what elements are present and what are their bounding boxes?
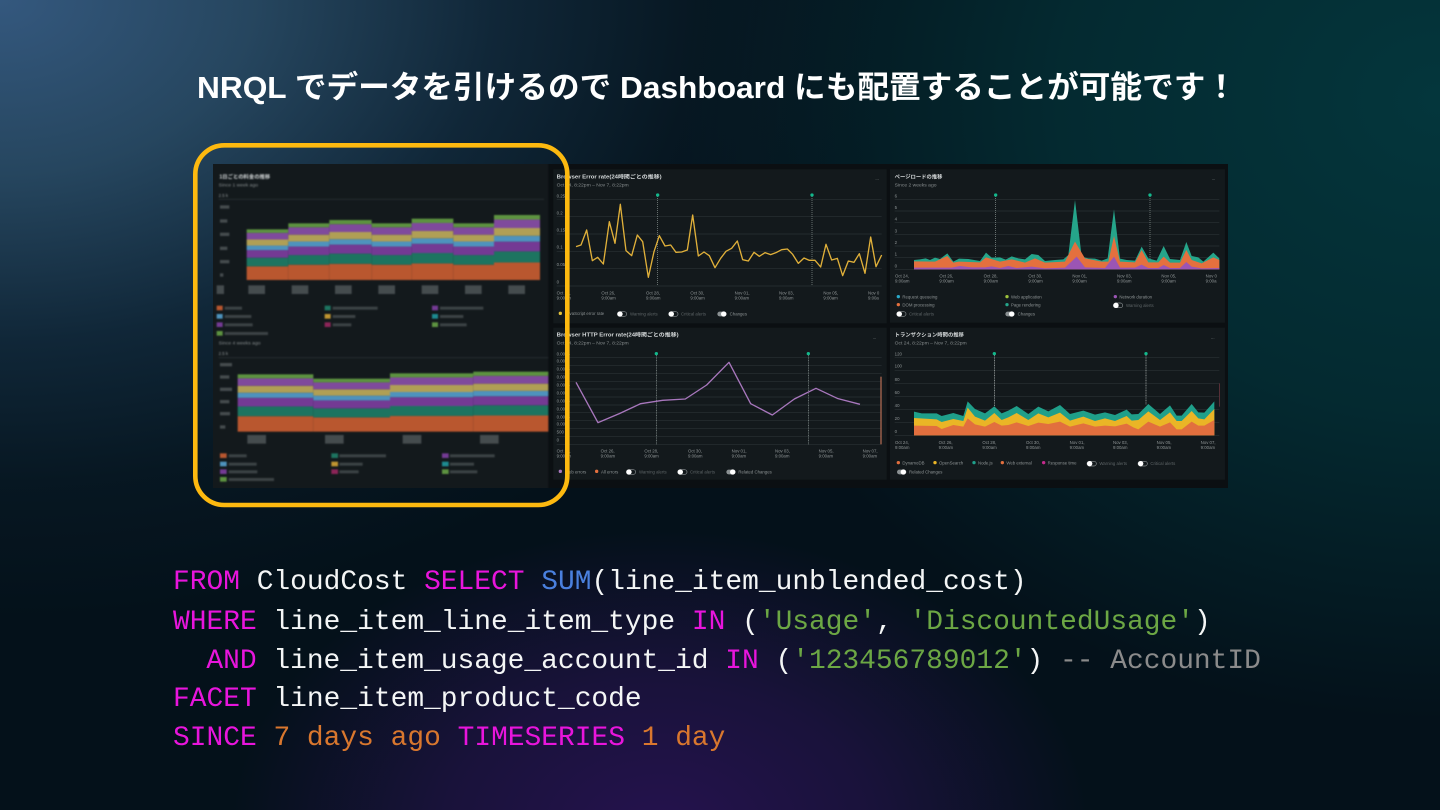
panel: blurred cost charts: 2.5 k [219,193,229,198]
panel: browser error rate: Oct 24, [557,290,571,295]
panel: browser error rate: Oct 26, [601,290,615,295]
panel: page load: 9:00am [1117,279,1132,284]
panel: browser error rate: Warning alerts [630,312,658,317]
panel: browser HTTP error rate: ... [873,334,876,339]
panel: browser error rate: 9:00am [557,295,571,300]
panel: browser HTTP error rate: 0.0035 [557,383,570,388]
panel: transaction time: 120 [895,351,902,356]
panel: browser HTTP error rate: 0.005 [557,359,568,364]
panel: page load: ... [1212,176,1215,181]
panel: browser error rate: ... [875,176,879,181]
panel: browser HTTP error rate: 0 [557,438,560,443]
panel: browser error rate: Changes [730,312,747,317]
panel: page load: 9:00a [1206,279,1217,284]
panel: transaction time: Related Changes [909,470,942,475]
panel: page load: Critical alerts [909,312,934,317]
panel: page load: Oct 28, [984,274,998,279]
code block: NRQL query: WHERE line_item_line_item_type IN ('Usage', 'DiscountedUsage') [173,607,1211,638]
panel: transaction time: 60 [895,390,900,395]
panel: browser HTTP error rate: Oct 30, [688,448,702,453]
panel: browser error rate: Nov 01, [735,290,750,295]
code block: NRQL query: AND line_item_usage_account_id IN ('123456789012') -- AccountID [206,646,1261,677]
panel: transaction time: 9:00am [1026,445,1041,450]
panel: transaction time [890,328,1225,480]
panel: transaction time: Oct 28, [982,440,996,445]
panel: browser error rate: 9:00am [690,295,705,300]
panel: blurred cost charts: 2.5 k [219,351,229,356]
panel: page load: Nov 03, [1117,274,1132,279]
panel: page load: 3 [895,228,898,233]
panel: page load: 5 [895,205,898,210]
panel: transaction time: Oct 30, [1026,440,1040,445]
panel: browser HTTP error rate: Related Changes [738,470,772,475]
panel: browser error rate: Browser Error rate(24時間ごとの推移) [557,173,662,181]
panel: browser error rate: Nov 0 [868,290,880,295]
panel: browser error rate [553,169,887,323]
panel: browser error rate: 9:00am [735,295,749,300]
panel: browser error rate: 9:00am [779,295,794,300]
panel: transaction time: Oct 24, [895,440,909,445]
panel: page load: Request queueing [902,294,938,299]
panel: blurred cost charts: 1日ごとの料金の推移 [219,172,271,180]
panel: page load: Changes [1018,312,1035,317]
panel: browser HTTP error rate: Nov 07, [863,448,878,453]
panel: browser HTTP error rate: 9:00am [819,453,833,458]
panel: page load: 6 [895,193,898,198]
panel: browser HTTP error rate: Oct 24, [557,448,571,453]
panel: browser HTTP error rate: Oct 24, 8:22pm – Nov 7, 8:22pm [557,340,629,346]
panel: browser error rate: Oct 28, [646,290,660,295]
panel: browser HTTP error rate: 0.0015 [557,414,570,419]
panel: transaction time: OpenSearch [939,460,964,465]
panel: browser HTTP error rate: 0.0055 [557,351,570,356]
panel: page load: 1 [895,252,898,257]
panel: browser HTTP error rate: Browser HTTP Error rate(24時間ごとの推移) [557,331,679,339]
panel: page load: 9:00am [1028,279,1043,284]
panel: page load: Web application [1011,294,1042,299]
panel: page load: Nov 05, [1161,274,1176,279]
panel: transaction time: Nov 03, [1113,440,1128,445]
panel: browser error rate: 0.2 [557,211,563,216]
panel: transaction time: 9:00am [1070,445,1084,450]
panel: browser error rate: 0 [557,280,560,285]
panel: page load: Warning alerts [1126,303,1154,308]
callout: yellow highlight frame [195,145,567,505]
panel: page load: 9:00am [1161,279,1176,284]
panel: transaction time: Web external [1006,460,1032,465]
panel: browser error rate: 9:00a [868,295,879,300]
panel: transaction time: 9:00am [939,445,953,450]
panel: transaction time: 9:00am [982,445,997,450]
panel: browser error rate: Oct 30, [690,290,704,295]
panel: browser HTTP error rate: 0.004 [557,375,568,380]
panel: page load: DOM processing [902,302,935,307]
panel: browser HTTP error rate: 0.001 [557,422,568,427]
panel: browser HTTP error rate: Critical alerts [690,470,715,475]
panel: browser error rate: 0.1 [557,245,563,250]
code block: NRQL query [173,567,1261,754]
panel: page load: 0 [895,263,898,268]
panel: browser HTTP error rate: Nov 03, [775,448,790,453]
panel: transaction time: Node.js [978,460,993,465]
panel: browser error rate: 0.25 [557,193,566,198]
panel: browser HTTP error rate: Warning alerts [639,470,667,475]
panel: blurred cost charts: Since 4 weeks ago [219,340,261,346]
panel: browser error rate: 0.05 [557,262,566,267]
panel: browser error rate: JavaScript error rate [565,311,605,316]
panel: transaction time: 9:00am [895,445,910,450]
panel: transaction time: 20 [895,416,900,421]
panel: browser error rate: Nov 03, [779,290,794,295]
panel: page load: 2 [895,240,898,245]
title: NRQL でデータを引けるので Dashboard にも配置することが可能です！ [197,70,1237,105]
panel: transaction time: ... [1211,334,1215,339]
panel: transaction time: 9:00am [1113,445,1128,450]
panel: browser HTTP error rate: 9:00am [775,453,790,458]
panel: transaction time: Critical alerts [1150,461,1175,466]
panel: transaction time: Oct 24, 8:22pm – Nov 7, 8:22pm [895,340,967,346]
panel: page load: 9:00am [1072,279,1087,284]
panel: blurred cost charts [210,160,548,490]
panel: transaction time: Nov 07, [1201,440,1216,445]
panel: transaction time: Response time [1048,460,1077,465]
panel: page load: 9:00am [984,279,998,284]
panel: transaction time: Nov 05, [1157,440,1172,445]
panel: browser error rate: 9:00am [601,295,616,300]
panel: transaction time: Warning alerts [1099,461,1127,466]
panel: page load: 4 [895,217,898,222]
panel: page load: Oct 30, [1028,274,1042,279]
panel: transaction time: 9:00am [1201,445,1215,450]
panel: browser error rate: Oct 24, 8:22pm – Nov 7, 8:22pm [557,182,629,188]
panel: browser error rate: 0.15 [557,228,566,233]
panel: browser error rate: Critical alerts [681,312,706,317]
panel: transaction time: 9:00am [1157,445,1171,450]
panel: page load: Oct 26, [939,274,953,279]
panel: browser HTTP error rate: 0.0025 [557,398,570,403]
panel: transaction time: 80 [895,377,900,382]
code block: NRQL query: FACET line_item_product_code [173,684,642,715]
panel: page load: ページロードの推移 [895,172,943,180]
panel: browser error rate: 9:00am [823,295,838,300]
panel: browser HTTP error rate: Oct 28, [644,448,658,453]
panel: transaction time: 0 [895,429,898,434]
panel: browser HTTP error rate: 9:00am [557,453,571,458]
panel: transaction time: トランザクション時間の推移 [895,331,965,339]
panel: page load: Nov 0 [1206,274,1218,279]
panel: browser HTTP error rate: 500 µ [557,430,568,435]
panel: browser HTTP error rate: 0.003 [557,390,568,395]
panel: transaction time: Oct 26, [939,440,953,445]
panel: transaction time: DynamoDB [902,460,925,465]
panel: browser HTTP error rate: Nov 05, [819,448,834,453]
panel: browser HTTP error rate: 9:00am [644,453,659,458]
panel: page load [890,169,1225,323]
panel: browser HTTP error rate: All errors [601,469,618,474]
panel: browser HTTP error rate: 9:00am [863,453,877,458]
panel: page load: Network duration [1119,294,1153,299]
panel: browser HTTP error rate: 9:00am [688,453,703,458]
panel: transaction time: 40 [895,403,900,408]
panel: page load: Nov 01, [1072,274,1087,279]
panel: browser HTTP error rate: Nov 01, [732,448,747,453]
panel: page load: 9:00am [939,279,954,284]
panel: page load: Since 2 weeks ago [895,182,937,188]
code block: NRQL query: FROM CloudCost SELECT SUM(line_item_unblended_cost) [173,567,1027,598]
panel: browser HTTP error rate: 9:00am [732,453,746,458]
panel: browser HTTP error rate: 9:00am [601,453,615,458]
panel: browser HTTP error rate [553,328,887,480]
panel: page load: Oct 24, [895,274,909,279]
panel: browser HTTP error rate: 0.002 [557,406,568,411]
panel: browser HTTP error rate: 0.0045 [557,367,570,372]
panel: page load: Page rendering [1011,302,1041,307]
panel: blurred cost charts: Since 1 week ago [219,182,258,188]
panel: transaction time: 100 [895,364,902,369]
code block: NRQL query: SINCE 7 days ago TIMESERIES 1 day [173,723,725,754]
panel: browser error rate: Nov 05, [823,290,838,295]
panel: transaction time: Nov 01, [1070,440,1085,445]
dashboard screenshot [210,160,1228,490]
panel: browser error rate: 9:00am [646,295,661,300]
panel: page load: 9:00am [895,279,910,284]
panel: browser HTTP error rate: Oct 26, [601,448,615,453]
panel: browser HTTP error rate: Web errors [565,469,586,474]
